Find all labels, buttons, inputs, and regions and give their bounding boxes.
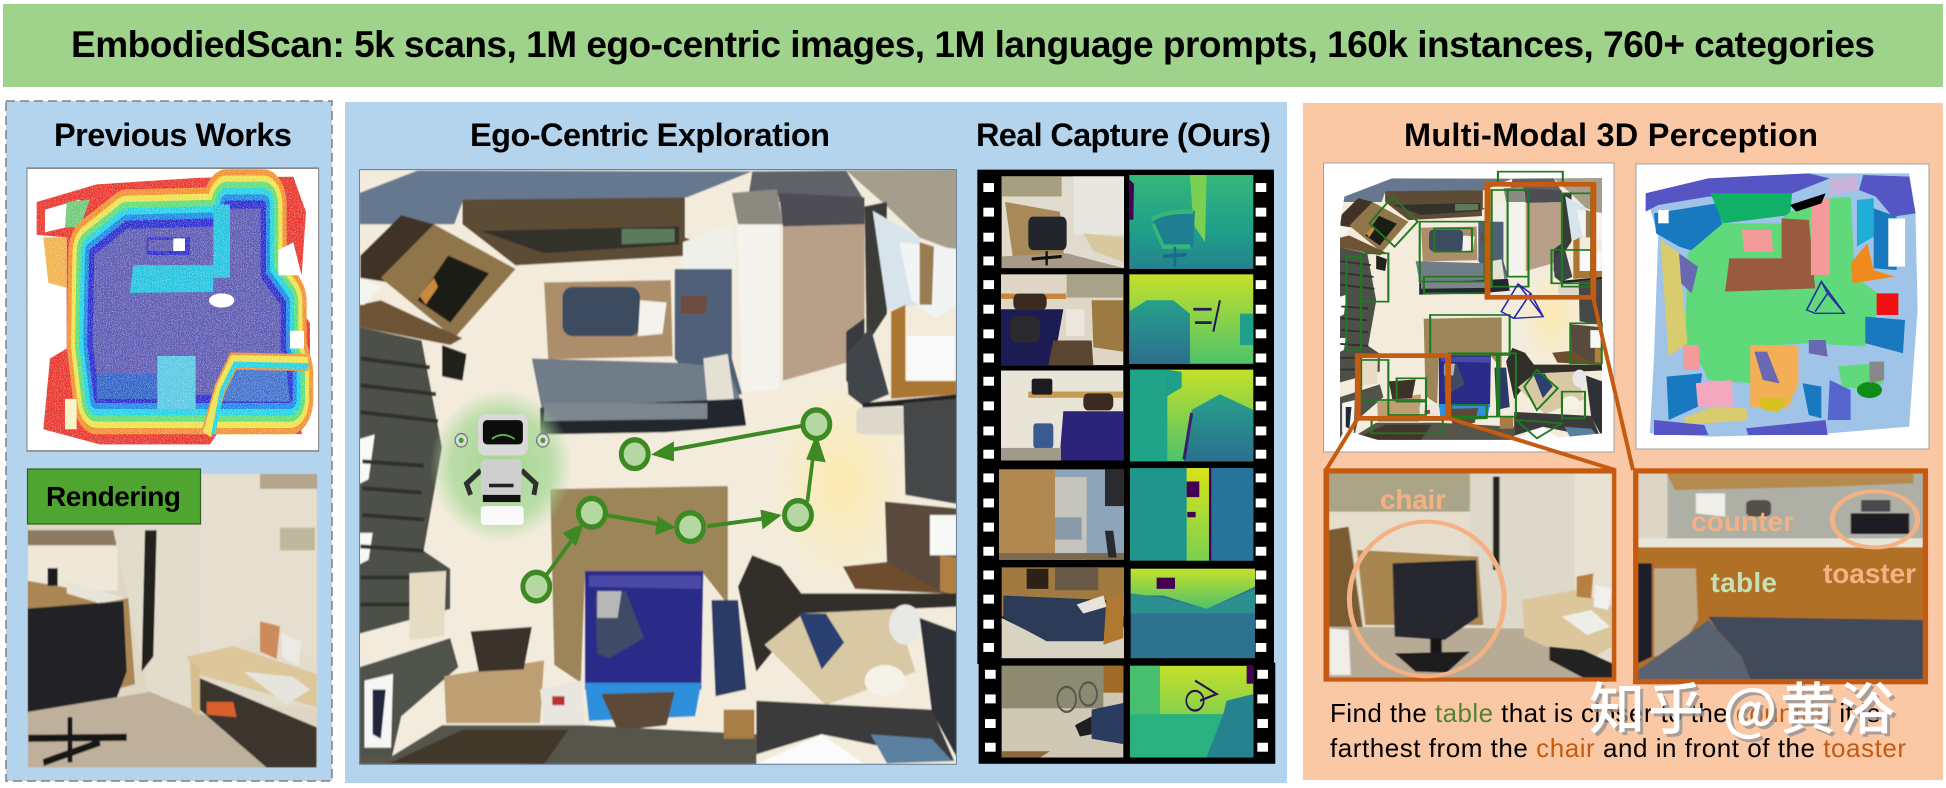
label: chair: chair [1380,484,1446,515]
point cloud map [27,168,319,451]
close-up: counter, table, toaster [1633,468,1928,684]
highlight boxes [1358,184,1593,418]
scan with green 3d boxes [1324,163,1614,452]
chair highlight ellipse [1349,522,1504,676]
heading: multi-modal 3d perception: Multi-Modal 3D Perception [1404,117,1818,153]
rendering label: Rendering [46,481,181,512]
label: table: table [1710,567,1777,598]
title banner [3,4,1943,87]
film sprocket holes [983,183,1268,752]
panel: ego-centric exploration and real capture [345,102,1287,783]
watermark: 知乎 @黄浴 [1592,668,1898,749]
heading: previous works: Previous Works [54,117,292,153]
caption text: farthest from the chair and in front of the toaster [1330,733,1906,763]
heading: real capture: Real Capture (Ours) [976,117,1271,153]
title banner: EmbodiedScan: 5k scans, 1M ego-centric images, 1M language prompts, 160k instances, 760+ categories [71,24,1875,65]
film strip of rgb and depth frames [977,170,1275,764]
camera frustum [1501,284,1543,318]
toaster highlight ellipse [1832,491,1918,547]
caption text: Find the table that is closer to the counter, it is [1330,698,1880,728]
heading: ego-centric exploration: Ego-Centric Exploration [470,117,830,153]
panel: multi-modal 3d perception [1303,103,1943,780]
rendering label [28,469,200,524]
robot with green halo [430,390,573,542]
zoom connector lines [1326,297,1633,470]
label: toaster: toaster [1823,558,1916,589]
rgb frames [999,176,1124,758]
label: counter: counter [1691,506,1794,537]
watermark: 知乎 @黄浴 [1589,665,1895,746]
exploration path nodes [523,410,830,601]
caption text [1330,698,1906,763]
rendering photo [28,474,317,768]
exploration path arrows [546,426,826,575]
camera frustum [1807,282,1844,313]
close-up: chair [1323,468,1616,682]
panel: previous works [6,101,332,781]
depth frames [1129,175,1255,758]
room scan view [360,170,956,764]
semantic segmentation map [1636,164,1929,449]
